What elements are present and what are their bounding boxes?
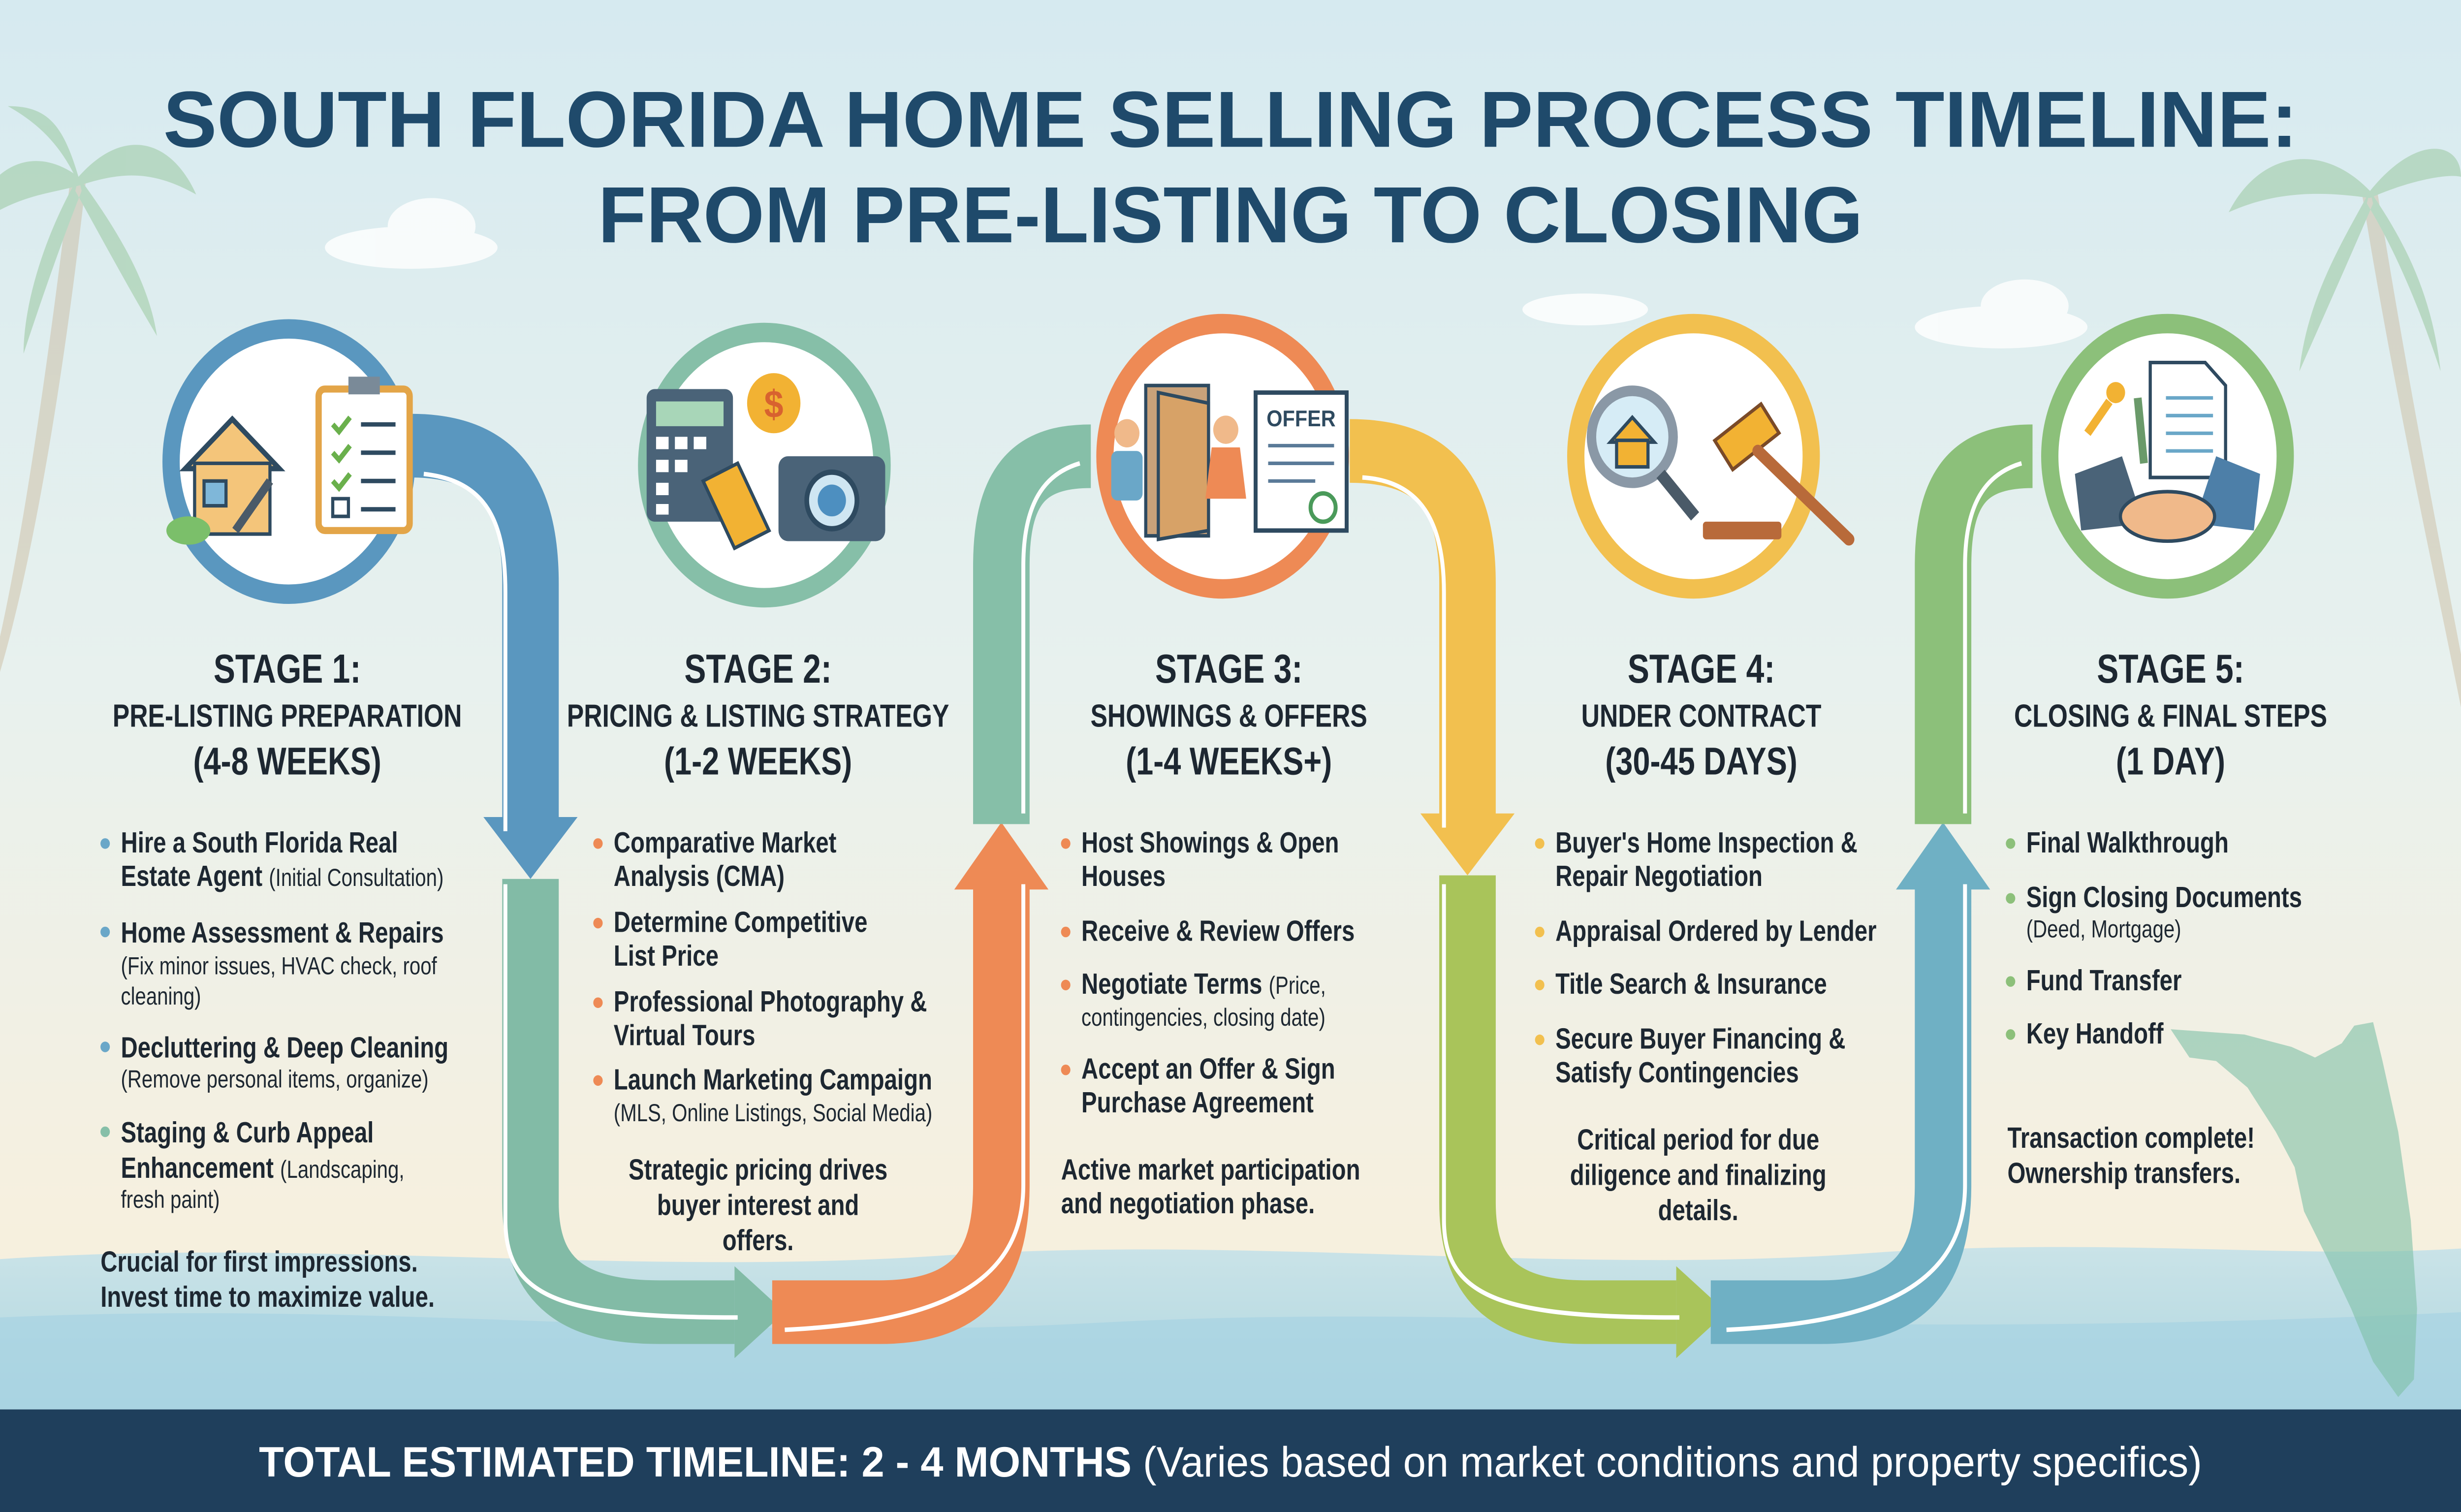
stage 5 text: Key Handoff <box>2026 1017 2164 1050</box>
stage 1 icon circle <box>166 329 410 594</box>
stage 4 text: details. <box>1658 1194 1738 1227</box>
stage 5 text: CLOSING & FINAL STEPS <box>2014 698 2327 734</box>
stage 4 text: Title Search & Insurance <box>1555 968 1827 1001</box>
stage 2 text: Launch Marketing Campaign <box>614 1063 932 1096</box>
stage 1 text: Staging & Curb Appeal <box>121 1116 374 1149</box>
stage 1 text: Crucial for first impressions. <box>100 1245 418 1278</box>
stage 2 text: PRICING & LISTING STRATEGY <box>567 698 949 734</box>
stage 4 text: Secure Buyer Financing & <box>1555 1023 1845 1055</box>
stage 5 text: STAGE 5: <box>2097 646 2244 692</box>
stage 2 text: Determine Competitive <box>614 906 867 939</box>
stage 1 text <box>100 646 462 1313</box>
stage 4 text: STAGE 4: <box>1628 646 1775 692</box>
arrow: stage3 to 4 <box>1350 451 1727 1358</box>
stage 4 text: Buyer's Home Inspection & <box>1555 826 1858 859</box>
stage 1 text: Estate Agent (Initial Consultation) <box>121 860 443 892</box>
flow arrows <box>411 445 2032 1358</box>
stage 5 text: Ownership transfers. <box>2008 1157 2240 1190</box>
stage 5 text <box>2008 646 2327 1190</box>
stage 1 text: fresh paint) <box>121 1186 220 1213</box>
footer bar <box>0 1410 2461 1512</box>
stage 2 text: Professional Photography & <box>614 985 927 1018</box>
stage 1 text: Home Assessment & Repairs <box>121 916 444 949</box>
stage 1 text: Hire a South Florida Real <box>121 826 398 859</box>
stage 1 text: Invest time to maximize value. <box>100 1281 435 1313</box>
stage 1 text: cleaning) <box>121 982 201 1010</box>
arrow: stage4 to 5 <box>1711 456 2032 1330</box>
stage 4 text: Satisfy Contingencies <box>1555 1056 1799 1089</box>
stage 5 text: Fund Transfer <box>2026 964 2181 997</box>
stage 4 text: diligence and finalizing <box>1570 1159 1827 1192</box>
stage 2 text: Comparative Market <box>614 826 836 859</box>
title <box>163 75 2298 259</box>
stage 2 icon circle <box>647 332 885 598</box>
stage 3 text: Negotiate Terms (Price, <box>1081 968 1326 1001</box>
stage 3 icon circle <box>1105 324 1347 589</box>
stage 2 text: STAGE 2: <box>684 646 832 692</box>
stage 3 text: Houses <box>1081 860 1166 892</box>
palm tree right <box>2229 149 2461 707</box>
stage 3 icon circle: OFFER <box>1266 406 1336 431</box>
stage 5 text: Final Walkthrough <box>2026 826 2229 859</box>
stage 4 text: (30-45 DAYS) <box>1605 740 1798 783</box>
stage 5 text: (1 DAY) <box>2116 740 2225 783</box>
stage 3 text: (1-4 WEEKS+) <box>1126 740 1332 783</box>
stage 1 text: PRE-LISTING PREPARATION <box>113 698 462 734</box>
stage 5 text: Sign Closing Documents <box>2026 881 2302 914</box>
arrow: stage2 to 3 <box>772 456 1091 1330</box>
florida map <box>2171 1022 2417 1397</box>
stage 3 text: and negotiation phase. <box>1061 1187 1315 1220</box>
stage 2 text: (1-2 WEEKS) <box>664 740 852 783</box>
stage 2 text <box>567 646 949 1257</box>
palm tree left <box>0 106 196 672</box>
stage 3 text: Active market participation <box>1061 1153 1360 1186</box>
stage 1 text: Decluttering & Deep Cleaning <box>121 1032 448 1064</box>
stage 1 text: STAGE 1: <box>214 646 361 692</box>
arrow: stage1 to 2 <box>411 445 785 1358</box>
stage 2 icon circle: $ <box>764 382 784 426</box>
stage 3 text: contingencies, closing date) <box>1081 1004 1325 1031</box>
stage 4 text: Critical period for due <box>1577 1123 1819 1156</box>
stage 4 text <box>1555 646 1877 1227</box>
stage 2 text: Virtual Tours <box>614 1019 755 1052</box>
stage 1 text: Enhancement (Landscaping, <box>121 1152 405 1184</box>
stage 4 text: Appraisal Ordered by Lender <box>1555 914 1877 947</box>
stage 3 text <box>1061 646 1367 1220</box>
stage 2 text: Strategic pricing drives <box>629 1153 887 1186</box>
title: FROM PRE-LISTING TO CLOSING <box>598 171 1863 259</box>
stage 5 text: Transaction complete! <box>2008 1122 2255 1154</box>
stage 1 text: (Fix minor issues, HVAC check, roof <box>121 952 437 980</box>
stage 3 text: STAGE 3: <box>1155 646 1302 692</box>
stage 2 text: Analysis (CMA) <box>614 860 785 892</box>
stage 2 text: buyer interest and <box>657 1189 859 1222</box>
stage 3 text: SHOWINGS & OFFERS <box>1090 698 1367 734</box>
stage 4 text: Repair Negotiation <box>1555 860 1763 892</box>
stage 4 text: UNDER CONTRACT <box>1581 698 1822 734</box>
clouds <box>325 198 2087 348</box>
stage 3 text: Purchase Agreement <box>1081 1086 1314 1119</box>
stage 5 text: (Deed, Mortgage) <box>2026 915 2181 943</box>
sea waves <box>0 1247 2461 1415</box>
stage 2 text: (MLS, Online Listings, Social Media) <box>614 1099 932 1127</box>
title: SOUTH FLORIDA HOME SELLING PROCESS TIMELINE: <box>163 75 2298 164</box>
stage 3 text: Accept an Offer & Sign <box>1081 1053 1335 1085</box>
stage 1 text: (4-8 WEEKS) <box>193 740 381 783</box>
bullet dots <box>100 838 2015 1137</box>
stage 5 icon circle <box>2050 324 2285 589</box>
stage 2 text: List Price <box>614 940 719 972</box>
stage 3 text: Receive & Review Offers <box>1081 914 1355 947</box>
stage 3 text: Host Showings & Open <box>1081 826 1339 859</box>
stage 2 text: offers. <box>723 1224 793 1257</box>
footer bar: TOTAL ESTIMATED TIMELINE: 2 - 4 MONTHS (Varies based on market conditions and property specifics) <box>259 1439 2202 1486</box>
stage 4 icon circle <box>1576 324 1849 589</box>
stage 1 text: (Remove personal items, organize) <box>121 1065 429 1093</box>
